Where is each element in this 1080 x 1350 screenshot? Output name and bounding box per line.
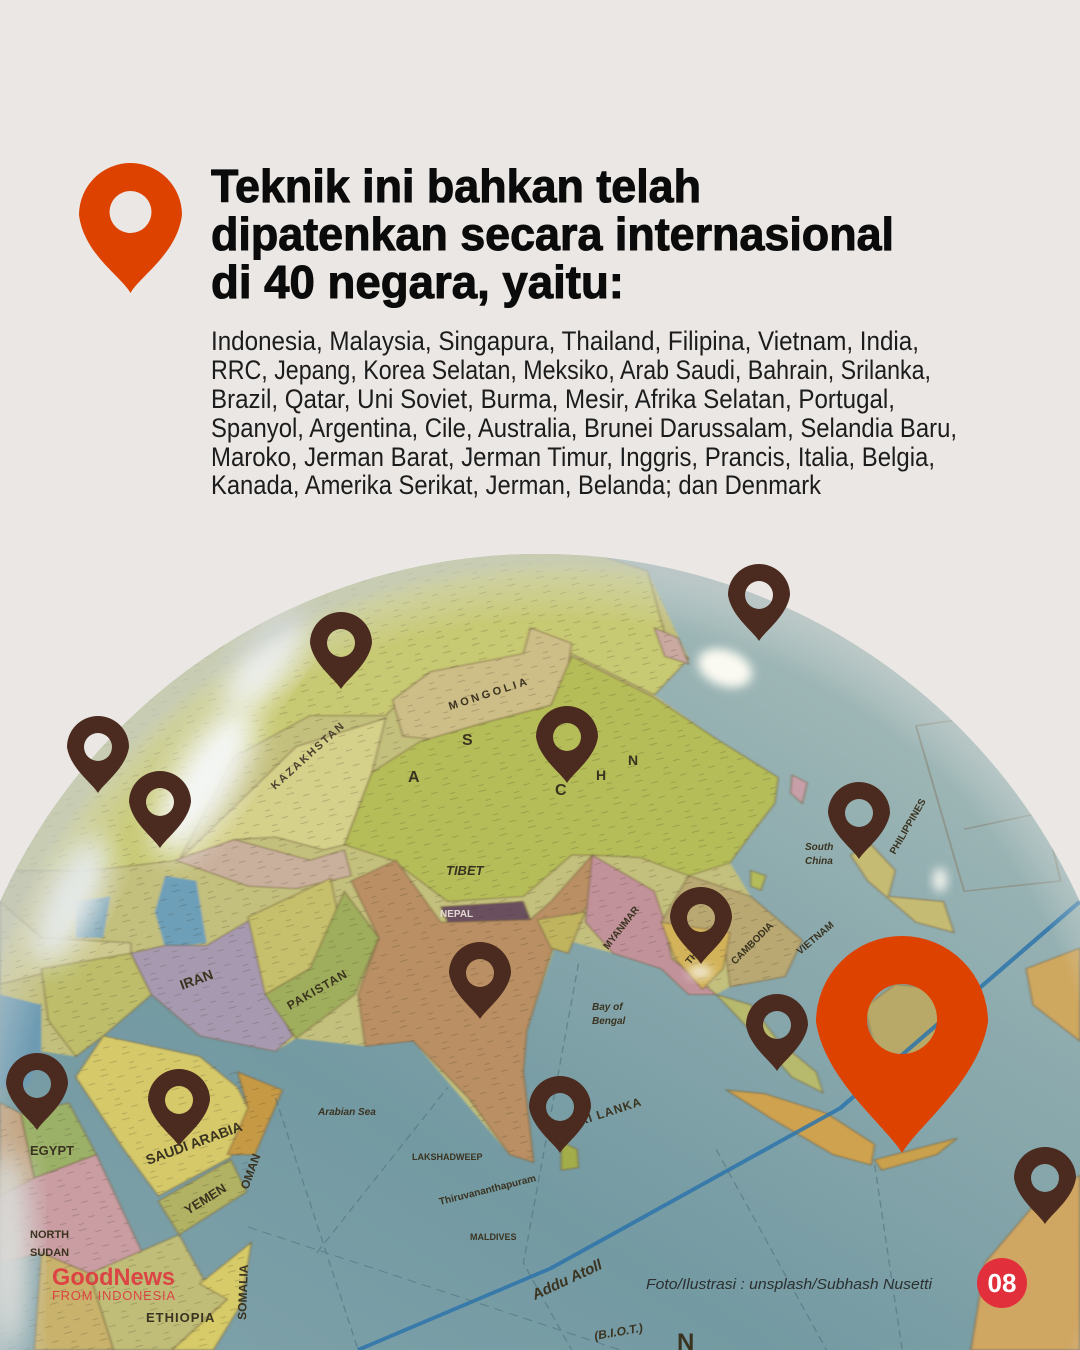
map labels: (B.I.O.T.) <box>593 1321 644 1343</box>
map labels: KAZAKHSTAN <box>269 719 348 792</box>
large orange pin: Indonesia <box>816 936 988 1153</box>
logo: GoodNews from Indonesia <box>52 1264 175 1303</box>
globe edge fade <box>0 540 1080 1350</box>
map labels: SOMALIA <box>235 1264 251 1320</box>
map labels: SUDAN <box>30 1247 69 1259</box>
Pacific inset frame lines <box>916 710 1061 891</box>
map labels: C <box>555 782 567 799</box>
pin: Philippines <box>828 782 890 859</box>
title <box>211 160 894 308</box>
Borneo <box>867 984 937 1054</box>
pin: India <box>449 942 511 1019</box>
equator line <box>358 902 1080 1350</box>
pin: Thailand <box>670 887 732 964</box>
map labels: Bengal <box>592 1016 626 1027</box>
Iraq <box>41 953 152 1056</box>
map labels: NORTH <box>30 1229 69 1241</box>
Myanmar <box>585 855 716 995</box>
Mediterranean <box>0 995 41 1087</box>
map labels: MALDIVES <box>470 1232 517 1242</box>
country list text <box>211 326 957 500</box>
Thailand <box>661 922 730 989</box>
country list text: Maroko, Jerman Barat, Jerman Timur, Inggris, Prancis, Italia, Belgia, <box>211 442 935 472</box>
map labels: THAILAND <box>684 921 725 967</box>
map labels: Addu Atoll <box>529 1256 606 1304</box>
map labels: TIBET <box>446 863 485 878</box>
pin: Australia <box>1014 1147 1076 1224</box>
pin: Russia east <box>728 564 790 641</box>
map labels: ETHIOPIA <box>146 1310 215 1325</box>
Yemen <box>158 1160 247 1235</box>
globe photo illustration <box>0 540 1080 1350</box>
Black Sea <box>76 896 110 938</box>
map labels: MYANMAR <box>602 904 642 952</box>
Caspian Sea <box>155 876 207 948</box>
title: Teknik ini bahkan telah <box>211 160 701 212</box>
pin: Saudi Arabia <box>148 1069 210 1146</box>
glare highlights <box>0 594 947 1350</box>
map labels: CAMBODIA <box>729 920 776 967</box>
pin: Egypt <box>6 1053 68 1130</box>
page number badge: 08 <box>988 1268 1016 1298</box>
Kazakhstan <box>179 718 386 860</box>
map labels: Bay of <box>592 1002 624 1013</box>
Mongolia <box>393 628 572 739</box>
map labels: N <box>628 752 638 768</box>
pin: north west 2 <box>129 771 191 848</box>
map labels: IRAN <box>178 966 215 993</box>
Hainan <box>751 871 766 890</box>
Nepal <box>441 902 530 922</box>
land label texture <box>0 550 802 1350</box>
map labels: SRI LANKA <box>569 1095 644 1131</box>
map labels: PHILIPPINES <box>888 797 929 856</box>
grid lines <box>248 964 902 1350</box>
South Sudan <box>34 1253 114 1350</box>
Malay Peninsula <box>716 995 823 1093</box>
logo: GoodNews from Indonesia: FROM INDONESIA <box>52 1288 175 1303</box>
map labels: LAKSHADWEEP <box>412 1152 483 1162</box>
logo: GoodNews from Indonesia: GoodNews <box>52 1264 175 1291</box>
India <box>351 855 592 1162</box>
Australia <box>971 1175 1080 1350</box>
page number badge <box>977 1258 1027 1308</box>
pin: Sri Lanka <box>529 1076 591 1153</box>
map labels: NEPAL <box>440 909 473 920</box>
Laos Cambodia Vietnam <box>661 876 802 987</box>
Pakistan <box>265 891 379 1038</box>
Philippines <box>851 845 954 933</box>
New Guinea edge <box>1026 948 1080 1041</box>
map labels: A <box>408 769 420 786</box>
Somalia <box>172 1242 251 1350</box>
map labels: EGYPT <box>30 1143 74 1158</box>
map labels: OMAN <box>238 1152 263 1191</box>
Korea and Japan side <box>654 628 689 664</box>
country list text: Spanyol, Argentina, Cile, Australia, Brunei Darussalam, Selandia Baru, <box>211 413 957 443</box>
country list text: Indonesia, Malaysia, Singapura, Thailand, Filipina, Vietnam, India, <box>211 326 919 356</box>
map labels: Arabian Sea <box>317 1107 376 1118</box>
title: dipatenkan secara internasional <box>211 208 894 260</box>
Afghanistan <box>248 878 337 995</box>
Eurasia land base <box>0 578 750 1148</box>
map labels: China <box>805 856 833 867</box>
icon: orange location pin <box>79 163 182 293</box>
Taiwan <box>791 775 807 803</box>
Sri Lanka <box>561 1142 579 1170</box>
country list text: RRC, Jepang, Korea Selatan, Meksiko, Arab Saudi, Bahrain, Srilanka, <box>211 355 931 385</box>
map labels: MONGOLIA <box>447 675 531 713</box>
Egypt <box>21 1103 96 1178</box>
Sudan <box>0 1155 145 1273</box>
map labels: PAKISTAN <box>284 967 350 1013</box>
China <box>344 656 778 902</box>
country list text: Brazil, Qatar, Uni Soviet, Burma, Mesir, Afrika Selatan, Portugal, <box>211 384 895 414</box>
map labels: Thiruvananthapuram <box>438 1173 537 1208</box>
Sumatra <box>727 1090 875 1165</box>
map labels <box>30 675 929 1350</box>
Oman <box>227 1072 282 1155</box>
map labels: YEMEN <box>182 1180 229 1218</box>
Ethiopia <box>90 1235 227 1350</box>
country list text: Kanada, Amerika Serikat, Jerman, Belanda; dan Denmark <box>211 470 821 500</box>
map labels: South <box>805 842 833 853</box>
title: di 40 negara, yaitu: <box>211 256 624 308</box>
Libya <box>0 1103 34 1196</box>
Arabia <box>76 1036 248 1196</box>
map labels: H <box>596 767 606 783</box>
pin: China <box>536 706 598 783</box>
Turkey <box>0 902 131 984</box>
Iran <box>131 917 293 1051</box>
Central Asia <box>176 840 351 889</box>
pin: Russia <box>310 612 372 689</box>
map labels: VIETNAM <box>795 920 836 957</box>
Bhutan and Bangladesh <box>537 912 585 953</box>
pin: Malaysia <box>746 994 808 1071</box>
Java <box>875 1138 957 1170</box>
map labels: S <box>462 732 473 749</box>
location pins <box>6 564 1076 1224</box>
pin: north west 1 <box>67 716 129 793</box>
Russia <box>0 540 689 871</box>
photo credit: Foto/Ilustrasi : unsplash/Subhash Nusetti <box>646 1276 933 1293</box>
map labels: SAUDI ARABIA <box>144 1118 244 1168</box>
